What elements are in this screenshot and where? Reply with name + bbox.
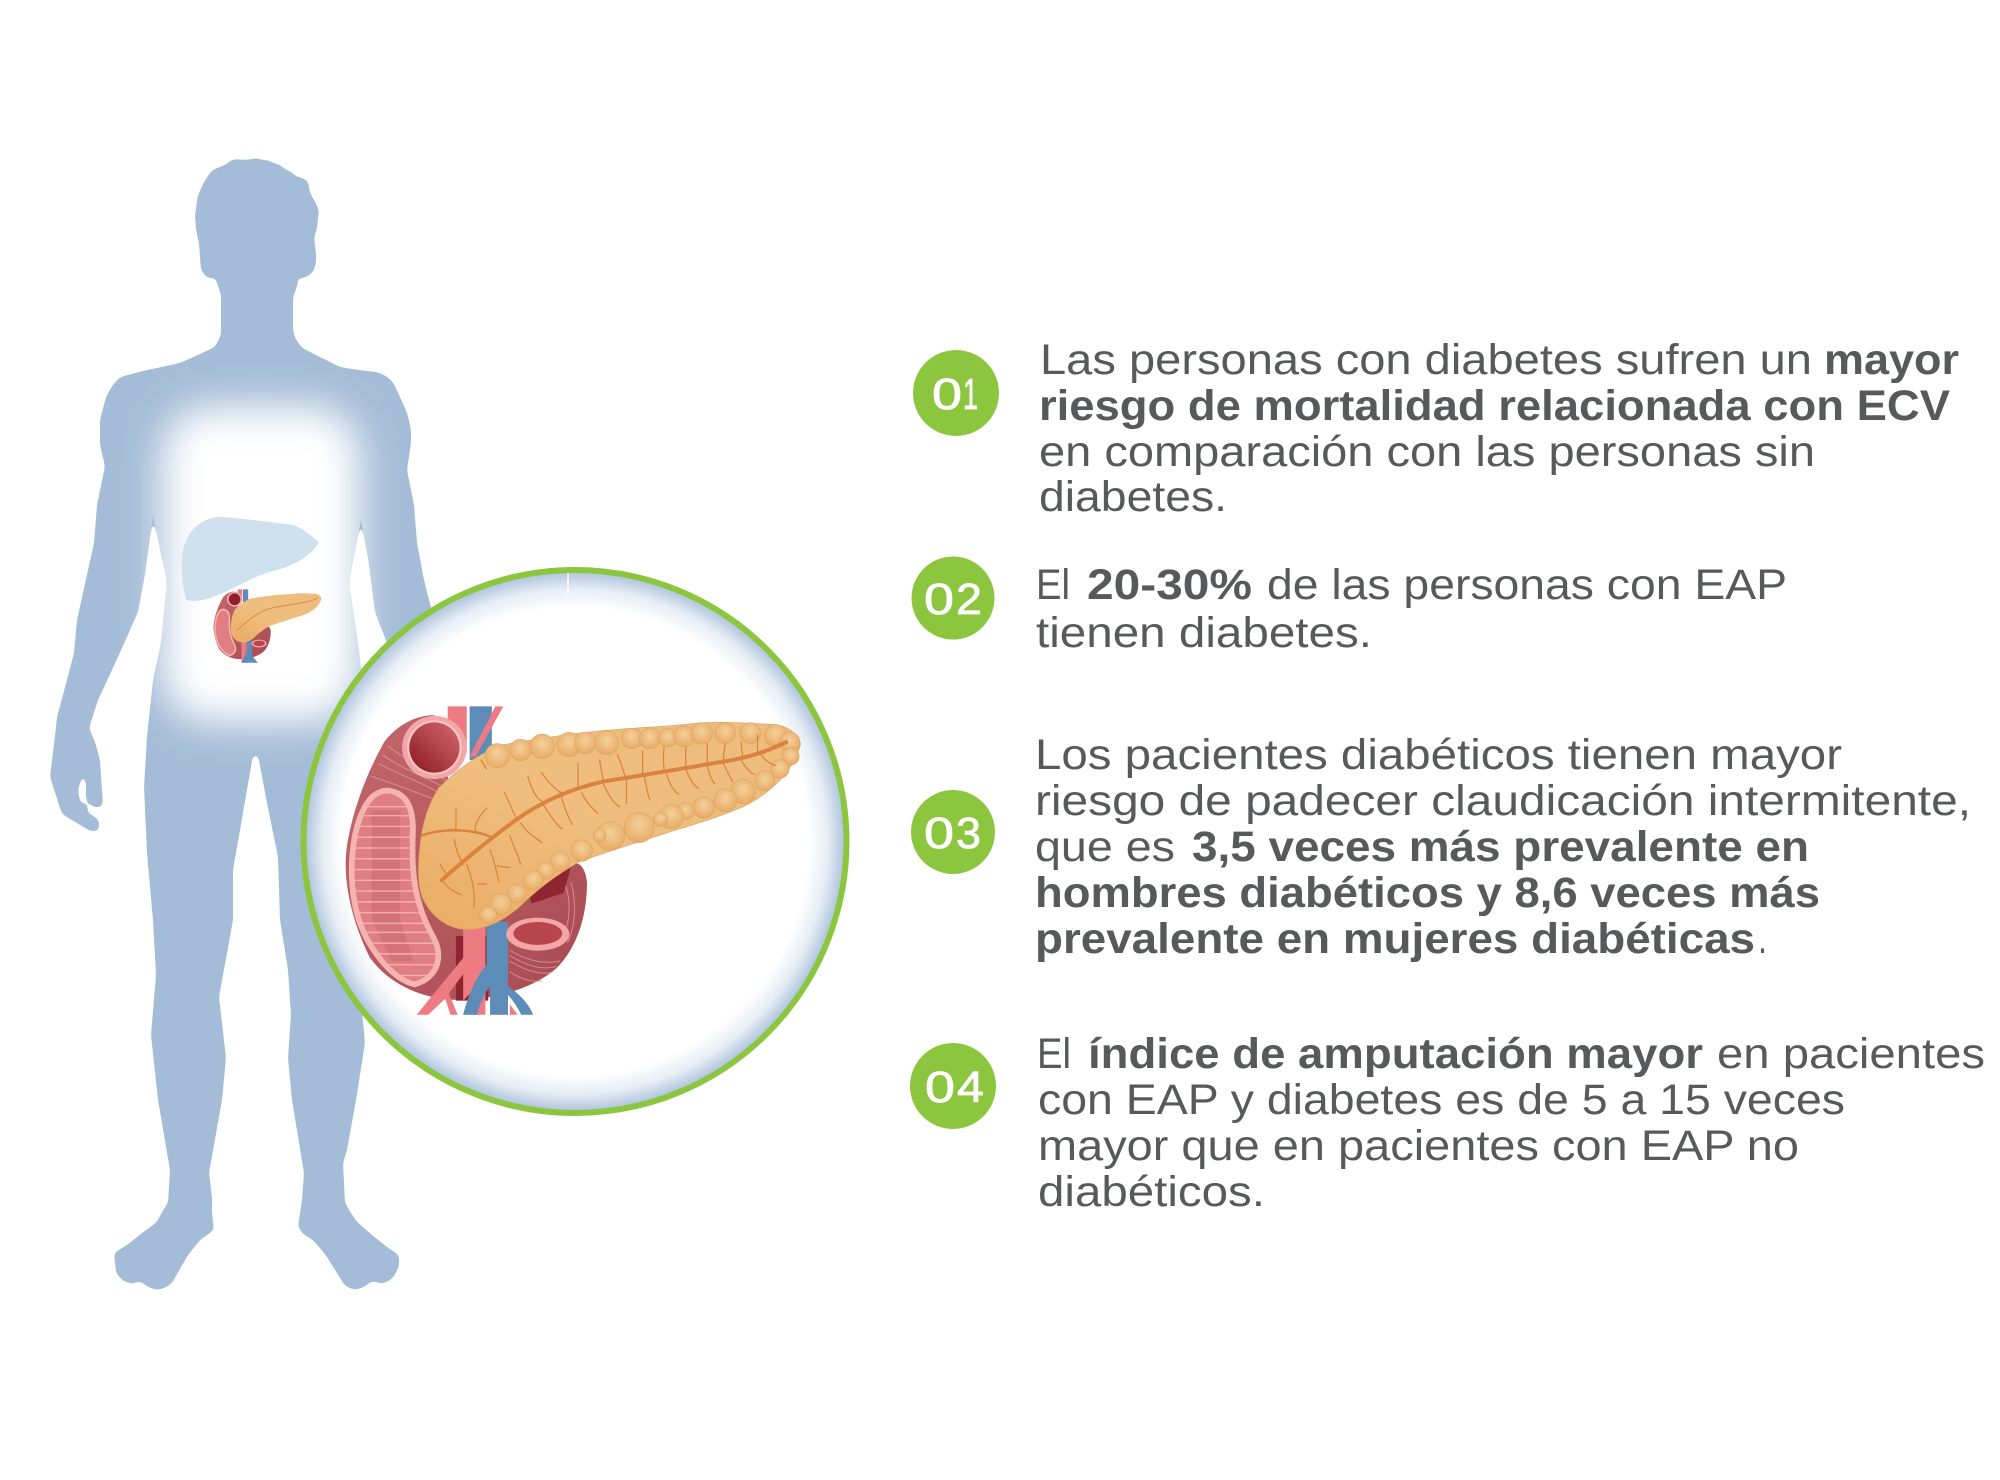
large pancreas illustration [346, 706, 801, 1015]
item 1 text: mayor [1824, 336, 1959, 384]
item 1 text [1039, 336, 1959, 521]
item 3 text: riesgo de padecer claudicación intermitente, [1035, 777, 1971, 825]
item 4 text [1037, 1030, 1985, 1216]
item 4 text: en pacientes [1717, 1030, 1985, 1078]
pancreas body [419, 722, 801, 929]
pancreas lobules [480, 723, 800, 924]
item 1 text: en comparación con las personas sin [1039, 428, 1815, 476]
item 3 badge [911, 790, 995, 874]
item 2 text: El [1036, 561, 1070, 609]
liver [182, 517, 319, 601]
item 4 text: diabéticos. [1038, 1168, 1265, 1216]
item 3 badge: 3 [956, 809, 981, 858]
item 4 badge [910, 1043, 996, 1129]
pancreatic duct [422, 735, 786, 907]
item 4 text: con EAP y diabetes es de 5 a 15 veces [1038, 1076, 1845, 1124]
duodenum and organ background [346, 715, 587, 1000]
item 3 text: 3,5 veces más prevalente en [1192, 823, 1809, 871]
item 1 text: diabetes. [1039, 473, 1227, 521]
item 2 badge: 0 [924, 575, 954, 624]
item 1 badge [913, 350, 999, 436]
item 2 text: de las personas con EAP [1267, 561, 1787, 609]
item 3 text [1035, 731, 1971, 963]
item 2 badge [912, 556, 994, 640]
item 3 badge: 0 [924, 809, 954, 858]
magnifier circle [304, 570, 846, 1113]
item 4 text: índice de amputación mayor [1088, 1030, 1703, 1078]
mini pancreas illustration [214, 589, 321, 663]
item 1 text: riesgo de mortalidad relacionada con ECV [1039, 382, 1950, 430]
blood vessels [416, 706, 533, 1015]
item 2 text: 20-30% [1087, 561, 1252, 609]
item 4 badge: 0 [925, 1063, 955, 1112]
lower intestinal ring [506, 918, 569, 951]
upper intestinal ring [402, 716, 467, 779]
item 4 text: mayor que en pacientes con EAP no [1038, 1122, 1799, 1170]
item 1 badge: 1 [963, 370, 978, 419]
item 2 text [1036, 561, 1787, 657]
item 3 text: que es [1035, 823, 1175, 871]
item 3 text: . [1758, 915, 1767, 963]
item 3 text: hombres diabéticos y 8,6 veces más [1035, 869, 1820, 917]
item 3 text: Los pacientes diabéticos tienen mayor [1035, 731, 1842, 779]
item 3 text: prevalente en mujeres diabéticas [1035, 915, 1755, 963]
item 2 badge: 2 [956, 575, 982, 624]
human body silhouette [50, 158, 470, 1290]
item 1 badge: 0 [932, 370, 962, 419]
item 4 text: El [1037, 1030, 1071, 1078]
item 1 text: Las personas con diabetes sufren un [1040, 336, 1812, 384]
item 4 badge: 4 [957, 1063, 984, 1112]
item 2 text: tienen diabetes. [1036, 609, 1372, 657]
